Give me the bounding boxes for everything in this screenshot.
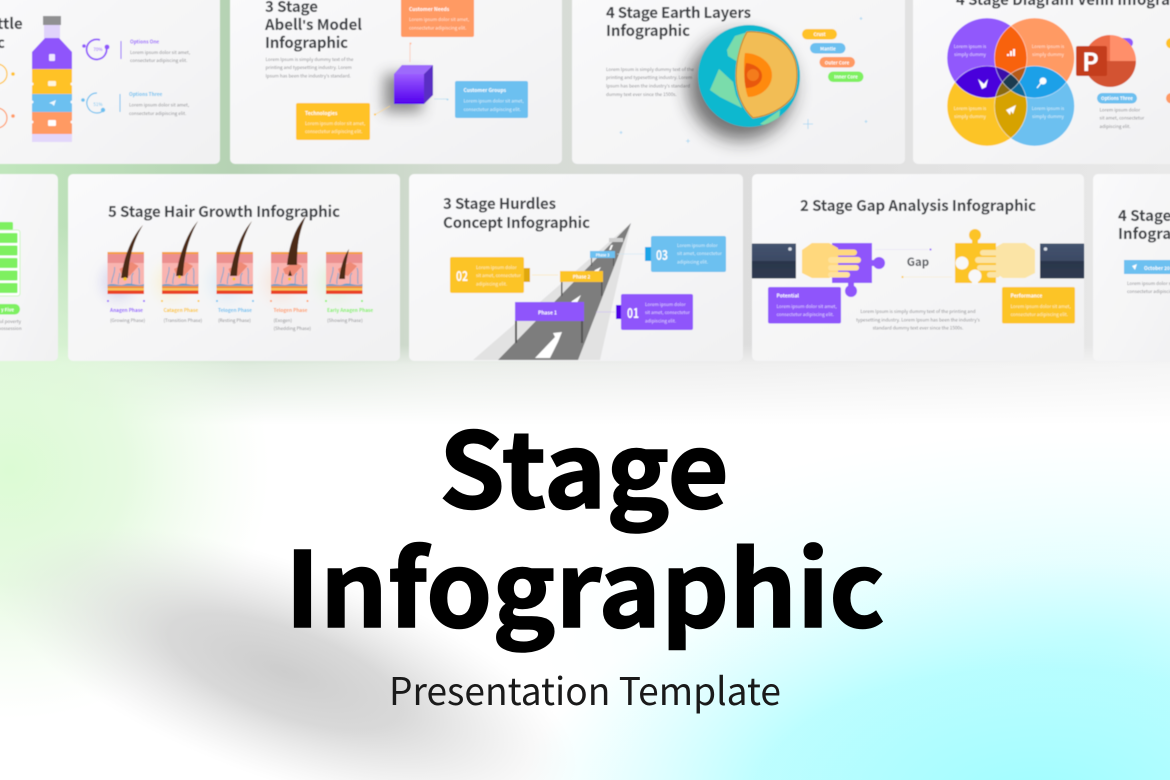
chart: cropped rings at left (0, 64, 15, 128)
title: Infographic: Infographic (285, 506, 885, 657)
callout: performance: Performance (1010, 292, 1042, 300)
callout: stage 01: Lorem ipsum dolor (645, 301, 686, 308)
labels: hair phases: Telogen Phase (274, 307, 308, 314)
callout: stage 02: sit amet, consectetur (476, 272, 521, 279)
text: options one (120, 38, 190, 64)
text: hair phase notes: (Exogen) (274, 318, 292, 324)
icon: hair stage 4 (265, 216, 308, 300)
heading: hurdles title: Concept Infographic (443, 212, 590, 233)
heading: Abell's model title: Abell's Model (264, 14, 362, 35)
icon: hurdle phase 2: Phase 2 (573, 274, 590, 280)
panel: 3 stage hurdles (409, 174, 743, 361)
text: gap description (856, 308, 980, 332)
panel: 3 stage Abell's model (230, 0, 562, 164)
label: gap with connectors (875, 248, 952, 278)
heading: gap analysis title: 2 Stage Gap Analysis Infographic (800, 195, 1036, 216)
labels: hair phases (109, 307, 373, 314)
text: hair phase notes: (Showing Phase) (327, 317, 363, 324)
text: Abell description: printing and typesetting industry. Lorem (266, 64, 352, 71)
callout: options three pill: adipiscing elit. (1100, 123, 1131, 130)
callout: customer groups: consectetur adipiscing elit. (464, 106, 521, 113)
heading: Abell's model title: Infographic (265, 32, 348, 53)
text: hair phase notes: (Growing Phase) (110, 317, 146, 324)
icon: hair stage 2 (156, 221, 198, 300)
panel: 4 stage earth layers (572, 0, 905, 164)
callout: October date: October 20 (1144, 265, 1170, 272)
illustration: left hand and purple puzzle (752, 243, 885, 297)
callout: options three pill (1097, 93, 1145, 130)
callout: stage 02 (450, 257, 558, 293)
labels: earth layer pills: Crust (813, 32, 826, 38)
illustration: road in perspective (473, 223, 631, 360)
callout: stage 01: 01 (627, 303, 639, 323)
icon: far hurdle (609, 238, 623, 242)
callout: customer groups (455, 81, 528, 118)
callout: stage 03: sit amet, consectetur (677, 250, 722, 257)
icon: hurdle phase 2 (560, 271, 603, 296)
heading: hurdles title: 3 Stage Hurdles (443, 193, 556, 214)
text: Abell description: Ipsum has been the industry's standard. (266, 72, 351, 80)
callout: stage 03: adipiscing elit. (677, 258, 708, 266)
icon: sparkle accents (620, 17, 868, 143)
callout: stage 02: adipiscing elit. (476, 280, 507, 288)
chart: Venn diagram: simply dummy (1032, 113, 1064, 120)
callout: stage 02: Lorem ipsum dolor (476, 264, 517, 271)
labels: hair phases: Anagen Phase (109, 307, 143, 314)
icon: hair stage 5 (320, 249, 362, 300)
callout: potential: Lorem ipsum dolor sit amet, (776, 303, 837, 310)
callout: potential (768, 287, 841, 324)
text: options three: Lorem ipsum dolor sit amet, (129, 102, 189, 108)
text: earth description: printing and typesetting industry. Lorem (606, 74, 692, 81)
labels: hair phases: Early Anagen Phase (327, 307, 373, 314)
icon: hair stage 3 (210, 221, 253, 300)
heading: hurdles title (443, 193, 590, 233)
labels: hair phases: Telogen Phase (218, 307, 252, 314)
callout: customer needs: consectetur adipiscing elit. (409, 24, 466, 32)
arrows: cube connectors (374, 42, 448, 116)
panel: 4 stage bottle infographic (0, 0, 220, 164)
labels: earth layer pills: Mantle (820, 46, 836, 52)
heading: timeline title (1118, 205, 1170, 244)
text: earth description: Ipsum has been the industry's standard (606, 82, 690, 90)
text: hair phase notes: (Transition Phase) (164, 317, 203, 324)
callout: potential: Potential (776, 292, 799, 300)
callout: stage 03: Lorem ipsum dolor (677, 242, 718, 249)
heading: earth layers title: Infographic (606, 20, 690, 41)
icon: PowerPoint logo (1076, 35, 1136, 87)
icon: hurdle phase 1: Phase 1 (538, 310, 557, 316)
illustration: right hand and yellow puzzle (955, 229, 1084, 284)
chart: Venn diagram: Lorem ipsum is (1032, 43, 1064, 50)
callout: customer needs: Lorem ipsum dolor sit amet, (409, 16, 469, 23)
text: hair phase notes (110, 317, 363, 332)
panel: battery stages (cropped) (0, 174, 58, 361)
callout: technologies: consectetur adipiscing elit. (305, 128, 362, 135)
labels: earth layer pills: Outer Core (825, 60, 850, 66)
callout: battery pill: y Five (1, 306, 14, 314)
callout: options three pill: Options Three (1101, 95, 1133, 102)
icon: hurdle phase 3: Phase 3 (596, 252, 609, 258)
callout: cropped option pills (1118, 38, 1170, 104)
text: earth description: Lorem Ipsum is simply dummy text of the (606, 66, 694, 73)
icon: hurdle phase 3 (590, 251, 615, 266)
icon: earth cross section (688, 25, 800, 140)
chart: progress ring two (81, 93, 105, 113)
icon: hurdle phase 1 (515, 302, 584, 343)
callout: October date (1124, 260, 1170, 295)
dots: phase markers (107, 300, 363, 302)
chart: Venn diagram: simply dummy (1032, 51, 1064, 58)
chart: progress ring two: 51% (93, 102, 103, 108)
labels: earth layer pills (802, 29, 864, 82)
heading: Abell's model title (264, 0, 362, 53)
text: hair phase notes: (Resting Phase) (218, 317, 251, 324)
text: options one: Lorem ipsum dolor sit amet, (130, 49, 190, 56)
chart: Venn diagram: Lorem ipsum is (954, 43, 986, 50)
subtitle: Presentation Template (389, 661, 781, 716)
callout: customer groups: Customer Groups (464, 87, 507, 94)
labels: earth layer pills: Inner Core (834, 74, 858, 80)
text: options one: Options One (130, 38, 159, 46)
callout: stage 01 (596, 294, 693, 330)
text: gap description: Lorem Ipsum is simply dummy text of the printing and (860, 308, 976, 315)
text: earth description: dummy text ever since the 1500s. (606, 91, 677, 98)
chart: Venn diagram (947, 18, 1074, 146)
text: hair phase notes: (Shedding Phase) (274, 325, 311, 332)
callout: stage 03 (617, 236, 726, 272)
panel: 5 stage hair growth (68, 174, 400, 361)
panel: 4 stage timeline (cropped) (1093, 174, 1170, 361)
labels: hair phases: Catagen Phase (164, 307, 198, 314)
text: Abell description: Lorem Ipsum is simply dummy text of the (266, 56, 354, 63)
heading: hair growth title: 5 Stage Hair Growth Infographic (108, 201, 340, 222)
text: gap description: typesetting industry. Lorem Ipsum has been the industry's (856, 316, 980, 324)
chart: Venn diagram: Lorem ipsum is (1032, 105, 1064, 112)
text: Abell description (266, 56, 354, 80)
text: earth description (606, 66, 694, 98)
callout: technologies (296, 103, 370, 140)
callout: options three pill: Lorem ipsum dolor (1100, 106, 1140, 114)
callout: customer needs (401, 0, 474, 37)
callout: performance: Lorem ipsum dolor sit amet, (1010, 303, 1071, 310)
chart: progress ring one (82, 39, 109, 59)
callout: performance: consectetur adipiscing elit. (1010, 311, 1068, 318)
text: gap description: standard dummy text ever since the 1500s. (873, 324, 963, 332)
chart: Venn diagram: Lorem ipsum is (954, 105, 986, 112)
callout: customer groups: Lorem ipsum dolor sit amet, (464, 98, 524, 104)
callout: technologies: Lorem ipsum dolor sit amet, (305, 120, 365, 127)
chart: Venn diagram: simply dummy (954, 113, 986, 120)
panel: 4 stage Venn diagram (913, 0, 1170, 164)
label: gap with connectors: Gap (907, 254, 929, 270)
text: options three: consectetur adipiscing elit. (129, 110, 186, 117)
callout: options three pill: sit amet, consectetur (1100, 114, 1145, 122)
callout: stage 02: 02 (456, 266, 468, 286)
icon: hair stage 1 (102, 225, 144, 300)
text: options three: Options Three (129, 91, 163, 98)
heading: earth layers title: 4 Stage Earth Layers (606, 2, 751, 23)
icon: segmented bottle (30, 16, 74, 142)
chart: Venn diagram: simply dummy (954, 51, 986, 58)
heading: timeline title: 4 Stage (1118, 205, 1170, 226)
callout: stage 03: 03 (656, 245, 668, 265)
callout: stage 01: adipiscing elit. (645, 318, 676, 324)
callout: battery pill (0, 304, 22, 332)
heading: earth layers title (606, 2, 751, 41)
panel: 2 stage gap analysis (752, 174, 1084, 361)
callout: stage 01: sit amet, consectetur (645, 309, 690, 316)
callout: technologies: Technologies (305, 110, 338, 117)
callout: performance (1002, 287, 1075, 324)
heading: timeline title: Infogra (1118, 223, 1170, 244)
icon: green battery (0, 222, 20, 296)
title: Stage: Stage (439, 387, 729, 538)
icon: 3D cube (384, 65, 433, 112)
callout: customer needs: Customer Needs (409, 6, 450, 13)
text: options one: consectetur adipiscing elit. (130, 57, 187, 64)
callout: potential: consectetur adipiscing elit. (776, 311, 834, 318)
chart: progress ring one: 70% (93, 47, 103, 53)
icon: PowerPoint logo: P (1082, 43, 1099, 79)
text: options three (120, 91, 189, 117)
